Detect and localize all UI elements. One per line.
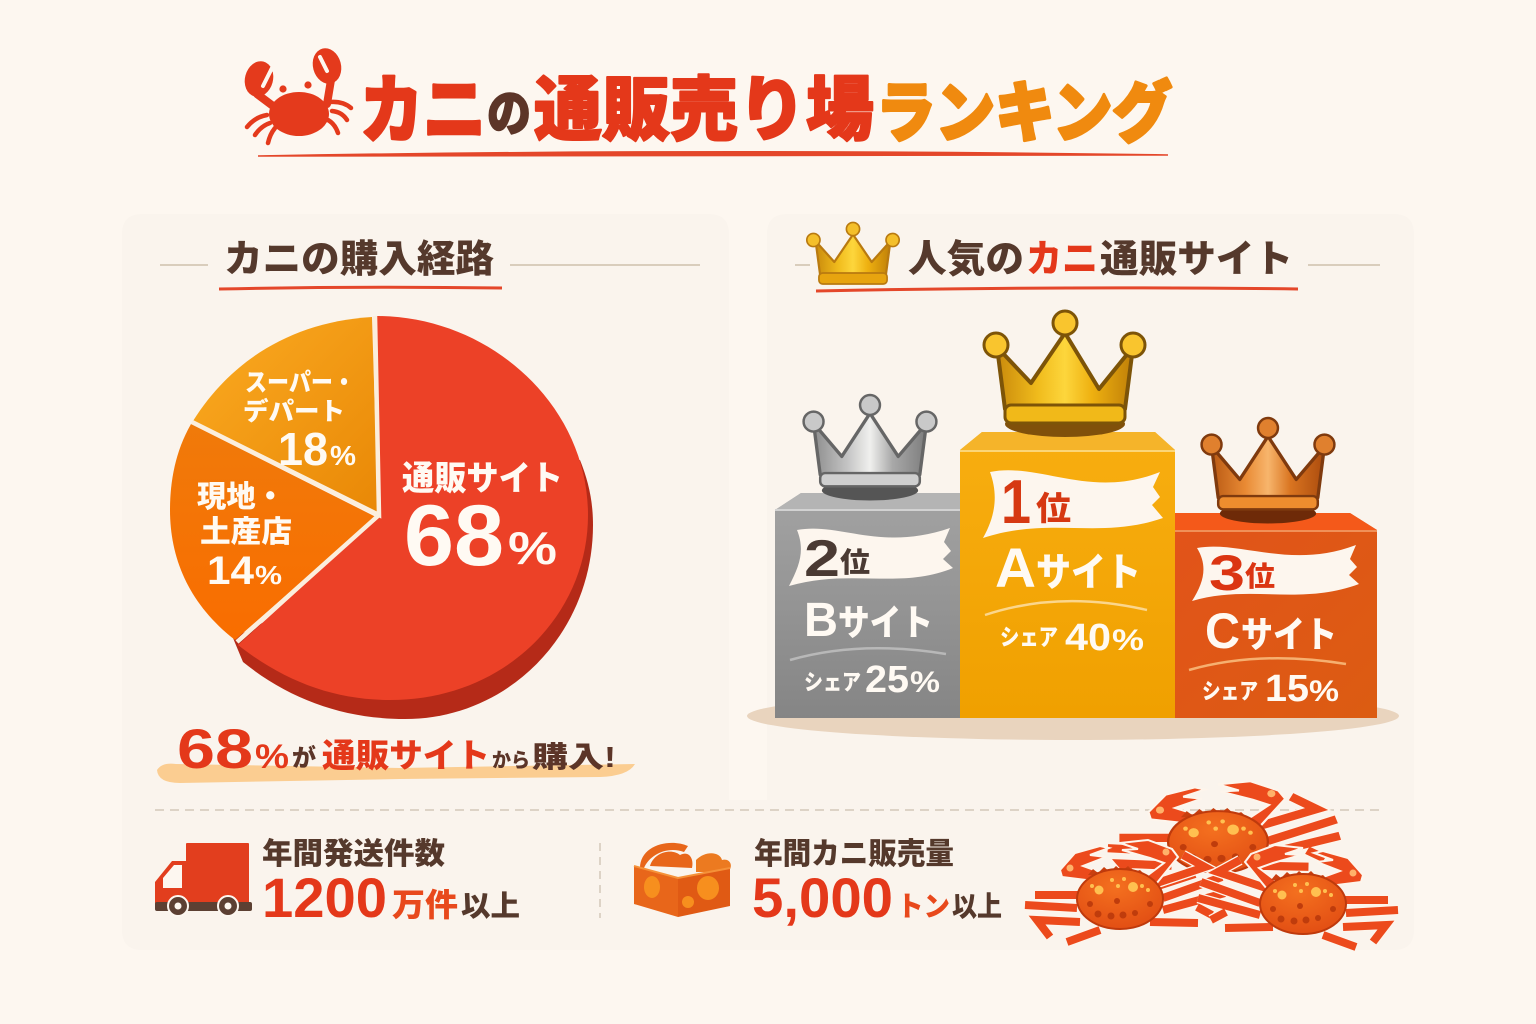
panels background bbox=[122, 214, 1414, 950]
label: local shops: % bbox=[255, 560, 282, 590]
ribbon: 3rd bbox=[1192, 545, 1359, 601]
heading: purchase channels: カニの購入経路 bbox=[224, 239, 494, 281]
title text: の: の bbox=[487, 86, 531, 142]
callout: 68% buy from mail order: 通販サイト bbox=[322, 737, 490, 774]
podium: 3rd place C site: % bbox=[1309, 675, 1339, 708]
slice: supermarket 18% bbox=[193, 317, 378, 513]
icon: title crab bbox=[241, 45, 351, 143]
stat: annual crab sales: 年間カニ販売量 bbox=[754, 838, 954, 871]
title underline bbox=[258, 152, 1168, 156]
ribbon: 2nd bbox=[789, 528, 953, 586]
podium: 1st place A site: % bbox=[1112, 624, 1144, 657]
panel: purchase channels bbox=[157, 239, 700, 783]
stat: annual crab sales: 以上 bbox=[952, 891, 1002, 922]
label: mail order: 68 bbox=[404, 488, 504, 584]
label: local shops bbox=[197, 481, 292, 593]
stat: annual shipments: 万件 bbox=[392, 887, 458, 923]
icon: crab box bbox=[634, 843, 731, 917]
podium: 2nd place B site: B bbox=[804, 594, 838, 647]
ribbon: 1st bbox=[983, 470, 1163, 538]
crown: silver bbox=[804, 395, 936, 500]
label: supermarket bbox=[243, 369, 356, 475]
heading: popular sites: 人気の bbox=[908, 239, 1024, 281]
stat: annual shipments: 1200 bbox=[262, 866, 387, 929]
label: supermarket: % bbox=[330, 440, 356, 471]
podium: 2nd place B site: シェア bbox=[804, 670, 861, 695]
podium: 2nd place B site: 25 bbox=[865, 659, 909, 701]
icon: heading crown bbox=[807, 222, 899, 284]
callout: 68% buy from mail order: 購入! bbox=[532, 741, 616, 774]
podium: 3rd place C site: 3 bbox=[1209, 545, 1245, 601]
podium: 1st place A site: シェア bbox=[1000, 624, 1058, 650]
podium: 2nd place B site: % bbox=[910, 666, 940, 699]
podium: 3rd place C site: C bbox=[1205, 603, 1240, 659]
label: mail order: % bbox=[508, 522, 557, 574]
label: mail order: 通販サイト bbox=[402, 460, 563, 498]
podium: 2nd place B site bbox=[775, 395, 961, 718]
slice: local shops 14% bbox=[170, 424, 376, 640]
pie chart bbox=[170, 316, 593, 719]
icon: truck bbox=[155, 843, 252, 916]
podium: 1st place A site: 40 bbox=[1065, 617, 1111, 659]
stat: annual crab sales bbox=[634, 838, 1002, 929]
callout: 68% buy from mail order: が bbox=[292, 744, 316, 772]
podium: 2nd place B site: サイト bbox=[838, 602, 933, 643]
podium: 2nd place B site: 2 bbox=[804, 530, 840, 588]
slice: mail order 68% bbox=[238, 316, 588, 700]
podium: 3rd place C site bbox=[1175, 418, 1377, 718]
label: supermarket: 18 bbox=[278, 423, 328, 475]
podium bbox=[747, 311, 1399, 740]
crown: gold bbox=[984, 311, 1145, 437]
callout: 68% buy from mail order: から bbox=[492, 749, 530, 772]
label: mail order bbox=[402, 460, 563, 584]
callout: 68% buy from mail order: % bbox=[255, 738, 289, 776]
podium: 1st place A site: A bbox=[995, 536, 1036, 599]
podium: 3rd place C site: 15 bbox=[1265, 668, 1309, 710]
podium: 3rd place C site: 位 bbox=[1245, 561, 1275, 592]
callout: 68% buy from mail order bbox=[157, 717, 635, 783]
podium: 1st place A site: 位 bbox=[1036, 490, 1071, 527]
crown: bronze bbox=[1202, 418, 1334, 523]
label: supermarket: デパート bbox=[243, 397, 345, 426]
title text: カニ: カニ bbox=[360, 69, 486, 152]
podium: 3rd place C site: シェア bbox=[1202, 679, 1258, 704]
heading: popular sites: カニ bbox=[1026, 239, 1098, 281]
podium: 1st place A site: サイト bbox=[1036, 552, 1141, 595]
panel: popular sites bbox=[747, 222, 1399, 740]
illustration: pile of crabs bbox=[1025, 781, 1398, 947]
label: local shops: 現地・ bbox=[197, 481, 285, 514]
podium: 1st place A site: 1 bbox=[1001, 468, 1031, 537]
podium: 1st place A site bbox=[960, 311, 1175, 718]
podium shadow bbox=[747, 692, 1399, 740]
stat: annual shipments: 年間発送件数 bbox=[262, 838, 445, 871]
podium: 3rd place C site: サイト bbox=[1241, 614, 1337, 655]
heading: popular sites: 通販サイト bbox=[1100, 239, 1293, 281]
label: local shops: 土産店 bbox=[200, 516, 292, 549]
label: local shops: 14 bbox=[207, 549, 255, 593]
stat: annual shipments bbox=[155, 838, 520, 929]
title text: 通販売り場: 通販売り場 bbox=[534, 71, 874, 149]
label: supermarket: スーパー・ bbox=[245, 369, 355, 397]
stat: annual crab sales: 5,000 bbox=[752, 866, 893, 929]
title bbox=[241, 45, 1172, 156]
title text: ランキング: ランキング bbox=[876, 76, 1172, 150]
pie depth bbox=[233, 460, 593, 719]
stat: annual shipments: 以上 bbox=[461, 890, 520, 923]
stat: annual crab sales: トン bbox=[897, 891, 950, 922]
heading: popular sites bbox=[795, 222, 1380, 291]
callout: 68% buy from mail order: 68 bbox=[177, 717, 253, 780]
podium: 2nd place B site: 位 bbox=[840, 547, 870, 578]
